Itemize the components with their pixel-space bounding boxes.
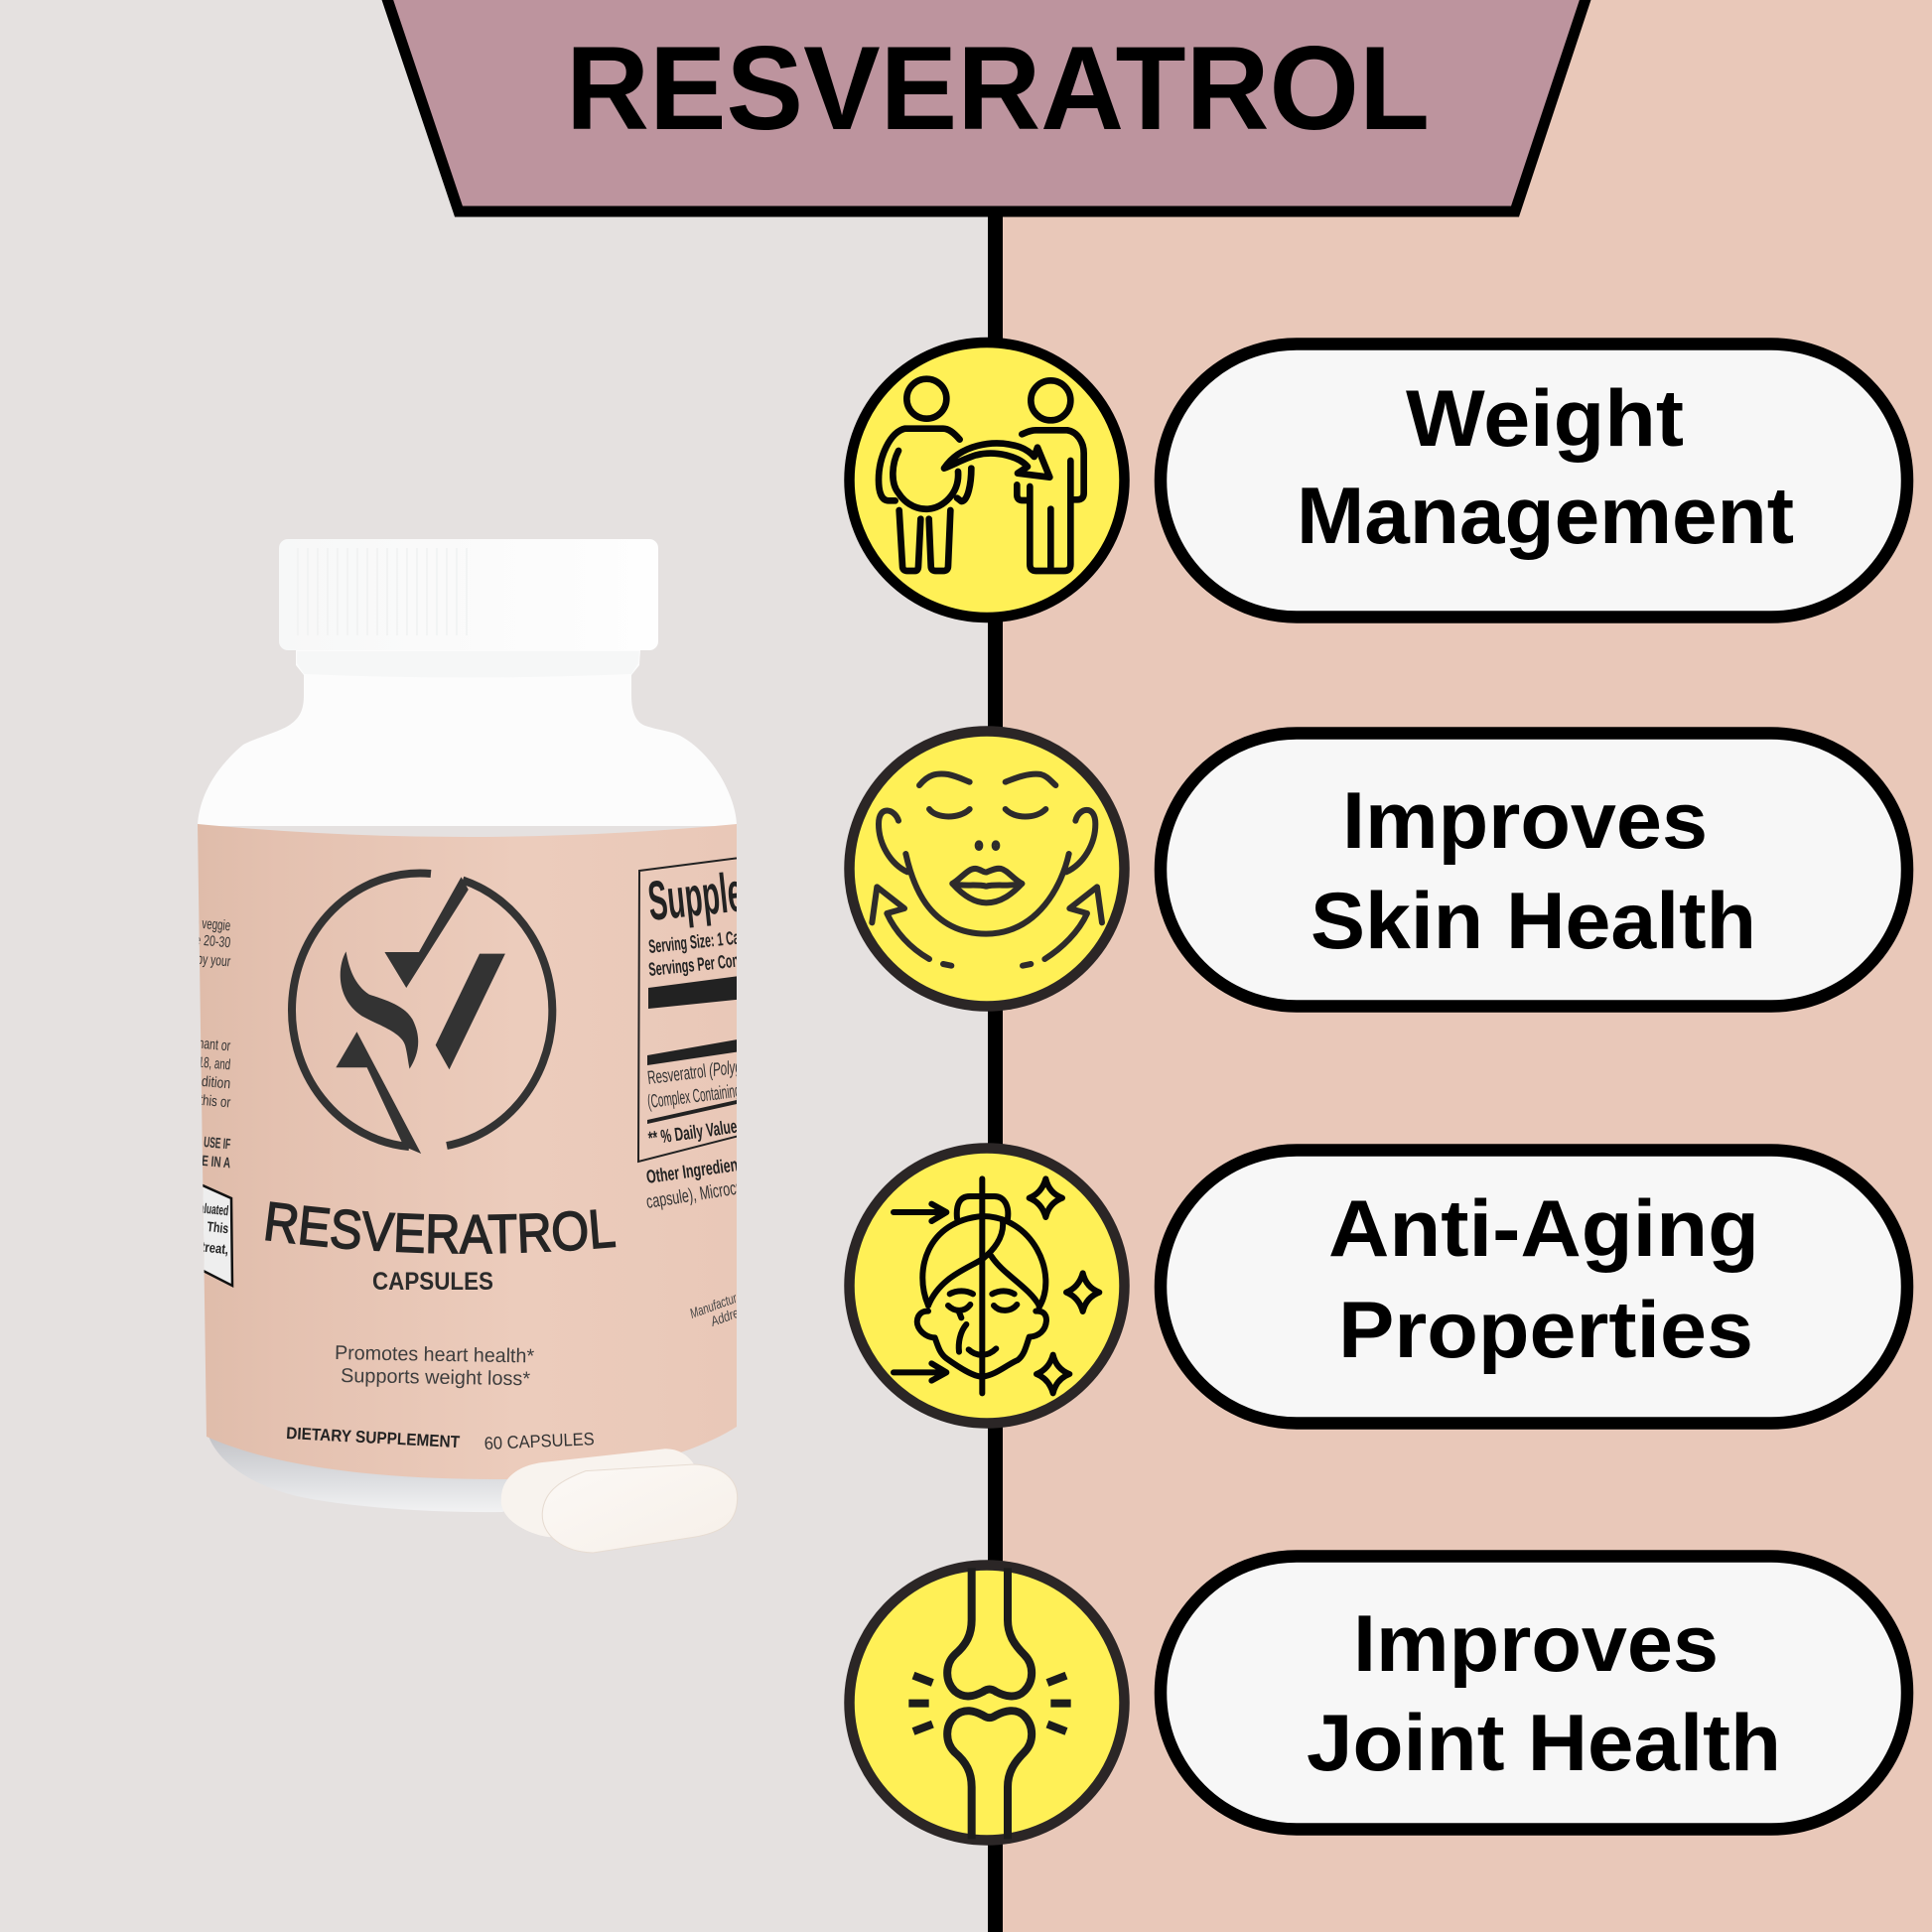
supplement facts panel: Manufactured bbox=[688, 1286, 750, 1321]
pill: anti-aging: Properties bbox=[1338, 1286, 1753, 1375]
bottle base bbox=[207, 1430, 695, 1512]
label text: left directions: . STORE IN A bbox=[169, 1150, 231, 1172]
pill: weight management: Weight bbox=[1406, 374, 1684, 464]
supplement facts panel: Other Ingredients: bbox=[645, 1153, 755, 1188]
label text: left directions bbox=[199, 919, 230, 1168]
label text: left directions: ected by your bbox=[169, 948, 231, 970]
label disclaimer box: nose, treat, bbox=[169, 1235, 229, 1257]
supplement facts panel: (Complex Containing 50 bbox=[646, 1079, 756, 1113]
label text: left directions: al condition bbox=[169, 1070, 231, 1092]
label text: left directions: using this or bbox=[169, 1089, 231, 1111]
pill: weight management bbox=[1161, 344, 1907, 618]
neck ring shading bbox=[297, 651, 639, 677]
supplement facts panel: Supple bbox=[645, 860, 747, 932]
icon: joint health bbox=[850, 1565, 1124, 1841]
pill: anti-aging: Anti-Aging bbox=[1328, 1184, 1759, 1274]
label dietary supplement: DIETARY SUPPLEMENT bbox=[286, 1424, 461, 1451]
background: right panel bbox=[1003, 0, 1932, 1932]
supplement facts panel: Address bbox=[708, 1301, 752, 1329]
supplement facts panel: capsule), Microcrys bbox=[644, 1175, 754, 1213]
supplement facts panel: ** % Daily Value no bbox=[647, 1114, 757, 1150]
pill: joint health: Improves bbox=[1353, 1599, 1719, 1689]
pill: weight management: Management bbox=[1297, 472, 1794, 561]
label text: left directions: ake (1) veggie bbox=[169, 912, 231, 934]
label logo bbox=[292, 873, 552, 1154]
pill: skin health bbox=[1161, 733, 1907, 1007]
supplement facts panel: Servings Per Contai bbox=[647, 949, 753, 981]
supplement facts panel bbox=[637, 858, 737, 1326]
pill: joint health: Joint Health bbox=[1307, 1699, 1781, 1788]
label disclaimer box: been evaluated bbox=[169, 1196, 229, 1218]
icon: skin health bbox=[850, 731, 1124, 1007]
label claim 1: Promotes heart health* bbox=[335, 1342, 534, 1368]
vertical timeline line bbox=[988, 199, 1003, 1932]
supplement bottle bbox=[198, 539, 738, 1553]
label disclaimer box bbox=[203, 1183, 234, 1288]
pill: joint health bbox=[1161, 1557, 1907, 1829]
pill: anti-aging bbox=[1161, 1150, 1907, 1424]
label claim 2: Supports weight loss* bbox=[341, 1365, 530, 1390]
bottle cap bbox=[279, 539, 658, 650]
label disclaimer box: tration. This bbox=[169, 1214, 229, 1236]
label text: left directions: e, take 20-30 bbox=[169, 929, 231, 951]
supplement facts panel: Resveratrol (Polygon bbox=[646, 1055, 756, 1089]
icon: weight management bbox=[850, 343, 1124, 618]
label capsule count: 60 CAPSULES bbox=[483, 1429, 595, 1453]
supplement facts panel: Serving Size: 1 Caps bbox=[647, 926, 753, 958]
label text: left directions: age of 18, and bbox=[169, 1051, 231, 1073]
icon: anti-aging bbox=[850, 1148, 1124, 1424]
capsules bbox=[501, 1449, 738, 1553]
background: left panel bbox=[0, 0, 988, 1932]
title: RESVERATROL bbox=[566, 22, 1430, 155]
label text: left directions: DO NOT USE IF bbox=[169, 1131, 231, 1153]
product type: CAPSULES bbox=[372, 1268, 493, 1296]
pill: skin health: Improves bbox=[1342, 776, 1708, 866]
pill: skin health: Skin Health bbox=[1311, 877, 1756, 966]
bottle label bbox=[198, 824, 737, 1479]
bottle neck and shoulder bbox=[198, 650, 737, 826]
label text: left directions: if pregnant or bbox=[169, 1033, 231, 1054]
product name: RESVERATROL bbox=[265, 1201, 616, 1254]
title banner bbox=[384, 0, 1588, 211]
